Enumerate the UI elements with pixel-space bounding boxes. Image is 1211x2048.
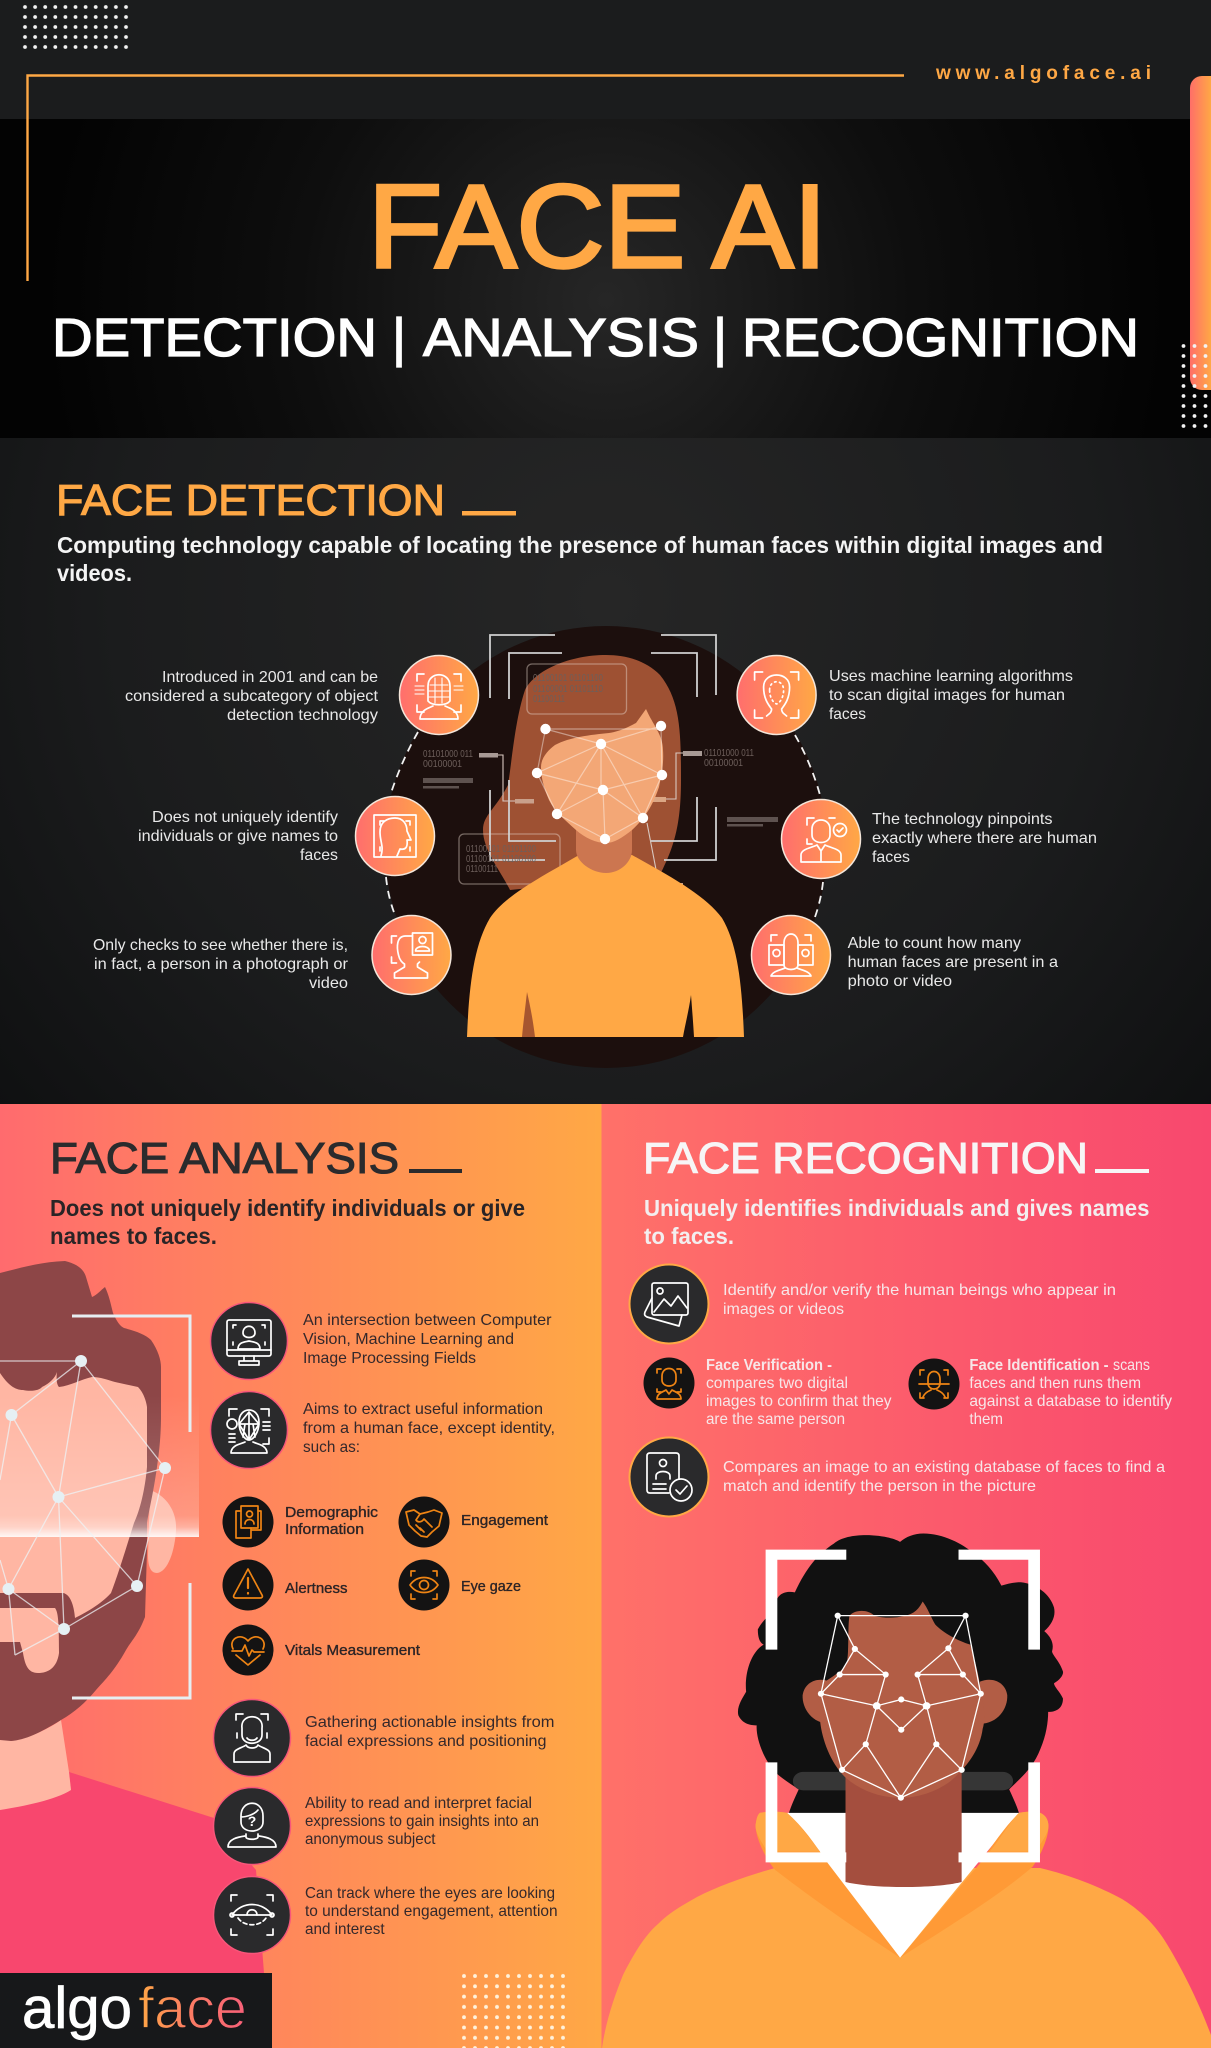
icon: photos xyxy=(630,1264,708,1344)
ears xyxy=(803,1680,830,1724)
item: actionable insights xyxy=(214,1700,554,1776)
callout: pinpoints: exactly where there are human xyxy=(872,830,1097,847)
sleeve creases xyxy=(522,992,535,1037)
item: intersection: Image Processing Fields xyxy=(303,1350,476,1367)
icon: faces in frames xyxy=(752,916,830,994)
callout: machine learning xyxy=(829,668,1073,723)
icon: person with question mark xyxy=(214,1788,290,1864)
item: face verification: Face Verification - xyxy=(706,1357,832,1374)
face xyxy=(541,709,663,843)
data card top: 01100101 01101100 xyxy=(533,673,603,684)
icon: person with question mark: ? xyxy=(248,1813,256,1829)
item: face identification: them xyxy=(969,1411,1003,1428)
binary labels and connectors: 00100001 xyxy=(423,759,462,770)
body xyxy=(467,855,744,1037)
data card bottom: 01100101 01100100 xyxy=(466,854,536,865)
detection description xyxy=(57,532,1103,586)
item: alertness xyxy=(222,1560,348,1610)
item: eye tracking xyxy=(214,1876,558,1954)
heading: face recognition: FACE RECOGNITION xyxy=(643,1134,1088,1183)
item: compares an image: match and identify the person in the picture xyxy=(723,1478,1036,1495)
subtitle: ANALYSIS xyxy=(423,308,699,368)
panel: header xyxy=(0,0,1211,438)
mouth xyxy=(0,1608,59,1673)
subtitle: | xyxy=(392,308,406,368)
item: actionable insights: facial expressions and positioning xyxy=(305,1733,546,1750)
callout: count faces: photo or video xyxy=(848,973,952,990)
item: aims to extract: such as: xyxy=(303,1439,360,1456)
callout: does not uniquely identify: Does not uniquely identify xyxy=(152,809,338,826)
heading: face analysis: FACE ANALYSIS xyxy=(50,1134,399,1183)
item: actionable insights: Gathering actionable insights from xyxy=(305,1714,554,1731)
callout: only checks: video xyxy=(309,975,348,992)
icon: face scan orange xyxy=(908,1358,960,1410)
icon: heart pulse xyxy=(222,1624,274,1676)
detection description: videos. xyxy=(57,560,132,586)
choker xyxy=(793,1772,1013,1790)
callout: only checks: Only checks to see whether there is, xyxy=(93,937,348,954)
item: identify and verify: Identify and/or verify the human beings who appear in xyxy=(723,1282,1116,1299)
illustration: woman with face recognition mesh xyxy=(602,1533,1211,2048)
icon: monitor with person xyxy=(210,1302,288,1380)
inner scan brackets xyxy=(509,653,697,841)
item: aims to extract: from a human face, except identity, xyxy=(303,1420,555,1437)
icon: person with check xyxy=(782,800,860,878)
orange frame line xyxy=(28,76,904,281)
heading: face detection: FACE DETECTION xyxy=(56,476,445,525)
data card top xyxy=(527,664,626,714)
item: eye gaze: Eye gaze xyxy=(461,1579,521,1595)
item: face verification: are the same person xyxy=(706,1411,845,1428)
item: face verification xyxy=(644,1357,892,1428)
item: facial expressions xyxy=(214,1788,539,1864)
title: FACE AI xyxy=(368,161,827,293)
icon: head profile in frame xyxy=(356,796,434,876)
callout: machine learning: faces xyxy=(829,706,866,723)
subtitle: | xyxy=(713,308,727,368)
item: face identification: against a database to identify xyxy=(969,1393,1172,1410)
item: identify and verify xyxy=(630,1264,1116,1344)
illustration: bearded man with face scan xyxy=(0,1261,264,1973)
callout: pinpoints: faces xyxy=(872,849,910,866)
item: face identification: scans xyxy=(1113,1357,1150,1374)
subtitle xyxy=(52,308,1139,368)
item: intersection: An intersection between Computer xyxy=(303,1312,552,1329)
icon: person orange xyxy=(644,1358,694,1408)
item: intersection: Vision, Machine Learning and xyxy=(303,1331,514,1348)
data card bottom: 01100111 xyxy=(466,864,498,875)
item: identify and verify: images or videos xyxy=(723,1301,844,1318)
callout: count faces: human faces are present in a xyxy=(848,954,1058,971)
item: eye tracking: Can track where the eyes are looking xyxy=(305,1885,555,1902)
icon: warning triangle xyxy=(222,1560,274,1610)
right gradient bar xyxy=(1190,76,1211,390)
item: face identification: Face Identification - xyxy=(969,1357,1109,1374)
subtitle: DETECTION xyxy=(52,308,377,368)
callout: does not uniquely identify: faces xyxy=(300,847,338,864)
callout: introduced in 2001 xyxy=(125,669,379,724)
scan brackets xyxy=(72,1316,190,1698)
recognition description: Uniquely identifies individuals and gives names xyxy=(644,1195,1150,1221)
scan brackets xyxy=(771,1555,1034,1857)
icon: demographic card xyxy=(222,1496,274,1548)
callout: count faces: Able to count how many xyxy=(848,935,1021,952)
shirt and collar xyxy=(756,1555,1049,1958)
item: demographic information xyxy=(222,1496,378,1548)
callout: introduced in 2001: Introduced in 2001 and can be xyxy=(162,669,378,686)
item: vitals measurement xyxy=(222,1624,420,1676)
shirt xyxy=(0,1772,264,1973)
callout: pinpoints: The technology pinpoints xyxy=(872,811,1052,828)
neck xyxy=(576,815,632,873)
icon: document with check xyxy=(630,1438,708,1516)
ear xyxy=(148,1490,176,1573)
icon: face mesh person xyxy=(210,1392,288,1468)
data card top: 01100111 xyxy=(533,694,565,705)
item: demographic information: Information xyxy=(285,1522,364,1538)
decorative dots top left xyxy=(20,2,131,52)
body xyxy=(602,1868,1211,2048)
item: face identification: faces and then runs them xyxy=(969,1375,1141,1392)
icon: person and photo xyxy=(372,916,451,994)
analysis description: Does not uniquely identify individuals or give xyxy=(50,1195,525,1221)
item: engagement xyxy=(398,1496,548,1548)
item: eye tracking: and interest xyxy=(305,1921,385,1938)
icon: face with grid xyxy=(400,656,478,734)
decorative dots bottom xyxy=(458,1971,568,2048)
item: facial expressions: expressions to gain insights into an xyxy=(305,1813,539,1830)
panel: face analysis xyxy=(0,1104,601,2048)
panel: face recognition xyxy=(600,1104,1211,2048)
decorative dots right xyxy=(1178,341,1211,431)
website url: www.algoface.ai xyxy=(935,63,1151,84)
panel: face detection xyxy=(0,438,1211,1104)
subtitle: RECOGNITION xyxy=(742,308,1139,368)
callout: introduced in 2001: detection technology xyxy=(227,707,378,724)
item: alertness: Alertness xyxy=(285,1581,348,1597)
callout: only checks: in fact, a person in a photograph or xyxy=(94,956,349,973)
callout: introduced in 2001: considered a subcategory of object xyxy=(125,688,379,705)
item: facial expressions: anonymous subject xyxy=(305,1831,436,1848)
callout: does not uniquely identify: individuals or give names to xyxy=(138,828,338,845)
item: eye tracking: to understand engagement, attention xyxy=(305,1903,558,1920)
binary labels and connectors: 01101000 011 xyxy=(423,749,473,760)
icon: handshake xyxy=(398,1496,450,1548)
callout: does not uniquely identify xyxy=(138,809,338,864)
face mesh xyxy=(818,1613,984,1801)
recognition description: to faces. xyxy=(644,1223,734,1249)
item: vitals measurement: Vitals Measurement xyxy=(285,1643,420,1659)
item: face verification: images to confirm that they xyxy=(706,1393,892,1410)
data card bottom: 01100101 01101100 xyxy=(466,844,536,855)
binary labels and connectors xyxy=(423,748,778,887)
icon: smiling person in frame xyxy=(214,1700,290,1776)
face xyxy=(0,1372,147,1618)
dashed ring segments xyxy=(386,732,823,917)
callout: machine learning: to scan digital images for human xyxy=(829,687,1065,704)
item: facial expressions: Ability to read and interpret facial xyxy=(305,1795,532,1812)
item: aims to extract xyxy=(210,1392,555,1468)
logo box xyxy=(0,1973,272,2048)
item: face verification: compares two digital xyxy=(706,1375,848,1392)
logo box: face xyxy=(138,1976,247,2041)
icon: eye scan xyxy=(214,1876,290,1954)
data card bottom xyxy=(459,834,560,884)
analysis description: names to faces. xyxy=(50,1223,217,1249)
callout: count faces xyxy=(848,935,1058,990)
item: compares an image xyxy=(630,1438,1165,1516)
item: intersection xyxy=(210,1302,552,1380)
callout: only checks xyxy=(93,937,349,992)
item: compares an image: Compares an image to an existing database of faces to find a xyxy=(723,1459,1165,1476)
face mesh xyxy=(532,721,667,844)
hair and beard xyxy=(0,1261,161,1741)
recognition description xyxy=(644,1195,1150,1249)
neck xyxy=(0,1720,71,1810)
item: engagement: Engagement xyxy=(461,1513,548,1529)
item: eye gaze xyxy=(398,1560,521,1610)
detection description: Computing technology capable of locating the presence of human faces within digital images and xyxy=(57,532,1103,558)
icon: eye in frame xyxy=(398,1560,450,1610)
face mesh xyxy=(0,1355,171,1655)
callout: pinpoints xyxy=(872,811,1097,866)
hair xyxy=(483,655,681,890)
logo box: algo xyxy=(22,1976,132,2041)
face xyxy=(819,1601,984,1798)
illustration: woman with face scan xyxy=(423,635,778,1037)
item: face identification xyxy=(908,1357,1172,1428)
dark circle backdrop xyxy=(385,626,827,1068)
neck xyxy=(846,1762,962,1887)
outer scan brackets xyxy=(490,635,716,860)
callout: machine learning: Uses machine learning algorithms xyxy=(829,668,1073,685)
binary labels and connectors: 01101000 011 xyxy=(704,748,754,759)
data card top: 01100001 01101110 xyxy=(533,684,603,695)
binary labels and connectors: 00100001 xyxy=(704,758,743,769)
hair xyxy=(738,1533,1063,1821)
analysis description xyxy=(50,1195,525,1249)
scan overlay xyxy=(0,1395,199,1537)
item: demographic information: Demographic xyxy=(285,1505,378,1521)
icon: face scan dots xyxy=(737,656,816,734)
item: aims to extract: Aims to extract useful information xyxy=(303,1401,543,1418)
